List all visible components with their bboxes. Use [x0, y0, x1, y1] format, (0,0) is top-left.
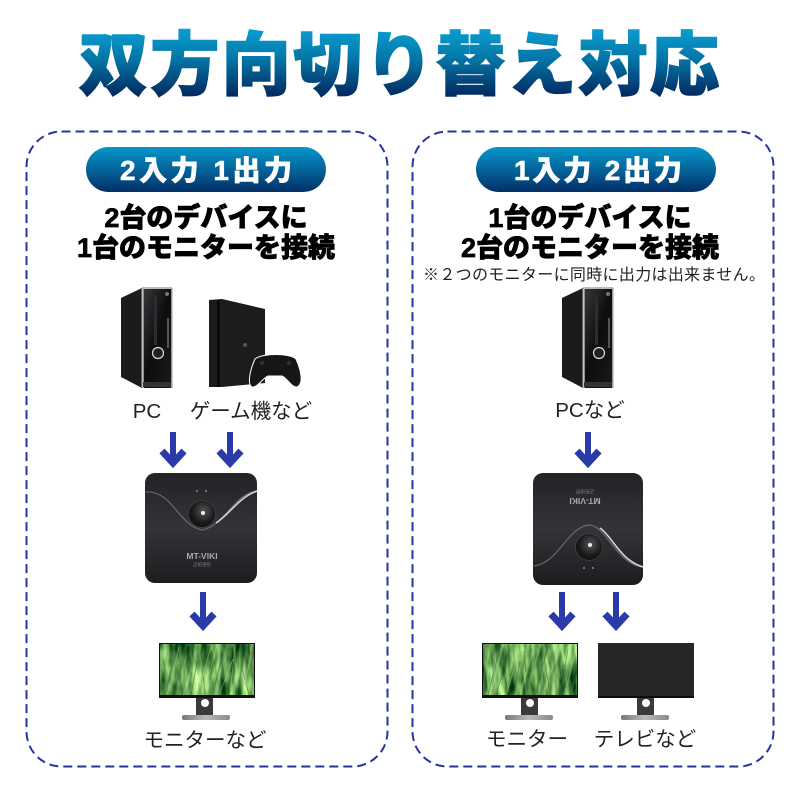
pill heading: 1 input 2 outputs [476, 147, 716, 192]
label: monitor etc.: モニターなど [144, 729, 266, 752]
icon: monitor [482, 643, 578, 720]
text: connect 1 device to 2 monitors: 2台のモニターを接続 [461, 232, 719, 263]
label: TV etc.: テレビなど [594, 728, 696, 751]
label: game console etc.: ゲーム機など [190, 400, 312, 423]
icon: desktop PC [121, 287, 172, 388]
icon: switch box flipped [533, 473, 643, 585]
icon: switch box: MT-VIKI [186, 551, 218, 561]
panel: 2 inputs 1 output [26, 132, 388, 766]
label: PC: PC [133, 400, 161, 423]
arrow: console to switch [219, 432, 241, 465]
pill heading: 2 inputs 1 output [86, 147, 326, 192]
label: PC etc.: PCなど [555, 399, 625, 422]
arrow: PC to switch [162, 432, 184, 465]
text: connect 2 devices to 1 monitor: 2台のデバイスに [104, 202, 308, 233]
icon: switch box [145, 473, 257, 583]
arrow: switch to monitor [192, 592, 214, 627]
text: connect 2 devices to 1 monitor: 1台のモニターを接続 [77, 232, 335, 263]
icon: switch box flipped: 迈拓维矩 [576, 488, 594, 495]
panel: 1 input 2 outputs [412, 132, 774, 766]
title: 双方向切り替え対応 [79, 27, 719, 104]
note: ※２つのモニターに同時に出力は出来ません。 [423, 266, 765, 284]
pill heading: 2 inputs 1 output: 2入力 1出力 [120, 155, 292, 186]
pill heading: 1 input 2 outputs: 1入力 2出力 [514, 155, 682, 186]
label: monitor: モニター [486, 728, 568, 751]
arrow: switch to monitor [551, 592, 573, 627]
arrow: PC to switch [577, 432, 599, 465]
icon: monitor [159, 643, 255, 720]
icon: switch box flipped: MT-VIKI [569, 496, 601, 506]
icon: game console and controller [209, 299, 301, 387]
text: connect 1 device to 2 monitors: 1台のデバイスに [488, 202, 692, 233]
icon: TV [598, 643, 694, 720]
icon: switch box: 迈拓维矩 [193, 561, 211, 568]
arrow: switch to TV [605, 592, 627, 627]
icon: desktop PC [562, 287, 614, 388]
